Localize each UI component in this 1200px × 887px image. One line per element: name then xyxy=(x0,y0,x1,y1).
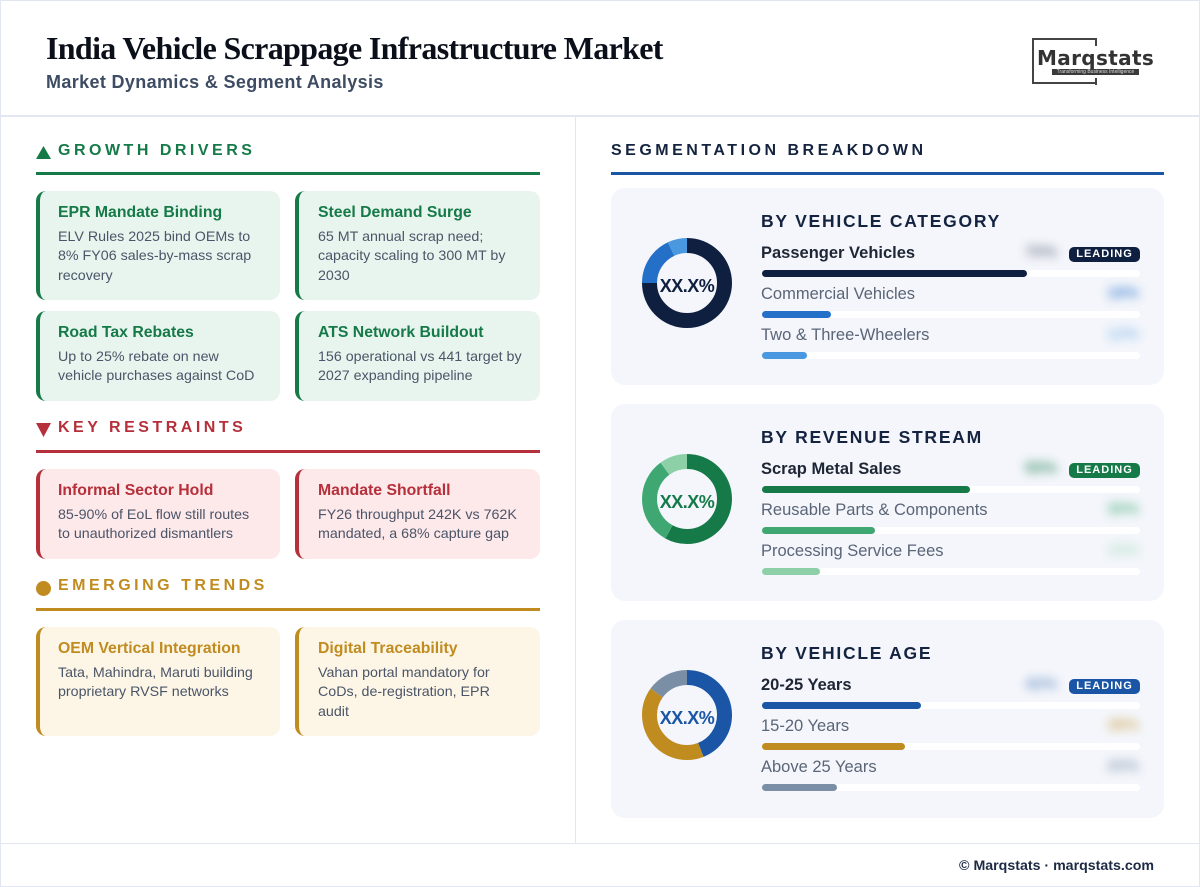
row: Passenger Vehicles: 70% xyxy=(1025,244,1057,261)
row: Two & Three-Wheelers: Two & Three-Wheelers xyxy=(761,326,929,344)
card: Road Tax Rebates: vehicle purchases against CoD xyxy=(58,368,254,384)
card: EPR Mandate Binding: EPR Mandate Binding xyxy=(58,204,222,221)
segment title: BY REVENUE STREAM xyxy=(761,427,983,447)
row: Two & Three-Wheelers xyxy=(761,324,1142,359)
row: Scrap Metal Sales: Scrap Metal Sales xyxy=(761,460,901,478)
row: 20-25 Years: 42% xyxy=(1025,676,1057,693)
footer xyxy=(1,843,1199,886)
row: 20-25 Years xyxy=(761,672,1140,709)
card: Road Tax Rebates xyxy=(36,311,280,401)
heading: emerging trends: EMERGING TRENDS xyxy=(58,577,268,594)
card: Digital Traceability: audit xyxy=(318,704,349,720)
row: Above 25 Years: 20% xyxy=(1107,758,1139,775)
row: Commercial Vehicles xyxy=(761,281,1144,318)
row: Processing Service Fees: Processing Service Fees xyxy=(761,542,944,560)
card: OEM Vertical Integration: OEM Vertical Integration xyxy=(58,640,241,657)
card: Road Tax Rebates: Up to 25% rebate on new xyxy=(58,348,219,364)
donut chart: revenue stream: XX.X% xyxy=(660,492,715,512)
panel: emerging trends xyxy=(36,577,540,736)
card: Digital Traceability: CoDs, de-registration, EPR xyxy=(318,684,490,700)
heading: segmentation breakdown: SEGMENTATION BREAKDOWN xyxy=(611,142,927,159)
row: Processing Service Fees xyxy=(761,541,1140,575)
row: Passenger Vehicles xyxy=(761,240,1140,277)
panel: key restraints xyxy=(36,419,540,559)
column divider xyxy=(575,117,576,843)
panel: growth drivers xyxy=(36,142,540,401)
icon: down triangle xyxy=(36,423,51,437)
card: Mandate Shortfall xyxy=(295,469,540,559)
card: EPR Mandate Binding: recovery xyxy=(58,268,113,284)
row: Commercial Vehicles: 18% xyxy=(1107,285,1139,302)
row: Scrap Metal Sales: LEADING xyxy=(1076,464,1133,476)
heading: key restraints xyxy=(36,419,540,453)
logo: Marqstats: Transforming Business Intelligence xyxy=(1057,69,1134,75)
subtitle: Market Dynamics & Segment Analysis xyxy=(46,72,384,92)
card: EPR Mandate Binding: ELV Rules 2025 bind OEMs to xyxy=(58,228,250,244)
panel: by vehicle category xyxy=(611,188,1164,385)
card: Informal Sector Hold: Informal Sector Hold xyxy=(58,482,213,499)
card: ATS Network Buildout: 2027 expanding pipeline xyxy=(318,368,473,384)
segment title: BY VEHICLE CATEGORY xyxy=(761,211,1001,231)
card: Steel Demand Surge: 2030 xyxy=(318,268,350,284)
row: Scrap Metal Sales: 55% xyxy=(1025,460,1057,477)
card: Mandate Shortfall: FY26 throughput 242K vs 762K xyxy=(318,506,517,522)
donut chart: vehicle age: XX.X% xyxy=(660,708,715,728)
card: Steel Demand Surge: 65 MT annual scrap need; xyxy=(318,228,483,244)
donut chart: revenue stream xyxy=(642,454,732,544)
donut chart: vehicle category: XX.X% xyxy=(660,276,715,296)
donut chart: vehicle category xyxy=(642,238,732,328)
card: ATS Network Buildout xyxy=(295,311,540,401)
card: Informal Sector Hold: to unauthorized dismantlers xyxy=(58,526,233,542)
card: Steel Demand Surge xyxy=(295,191,540,300)
row: Passenger Vehicles: Passenger Vehicles xyxy=(761,244,915,262)
row: Scrap Metal Sales xyxy=(761,456,1140,493)
heading: segmentation breakdown xyxy=(611,142,1164,175)
row: 20-25 Years: LEADING xyxy=(1076,680,1133,692)
card: Mandate Shortfall: mandated, a 68% capture gap xyxy=(318,526,509,542)
panel: by revenue stream xyxy=(611,404,1164,601)
card: Informal Sector Hold xyxy=(36,469,280,559)
heading: growth drivers: GROWTH DRIVERS xyxy=(58,142,255,159)
card: Digital Traceability xyxy=(295,627,540,736)
heading: growth drivers xyxy=(36,142,540,175)
row: Above 25 Years: Above 25 Years xyxy=(761,758,877,776)
row: Passenger Vehicles: LEADING xyxy=(1076,248,1133,260)
card: Informal Sector Hold: 85-90% of EoL flow still routes xyxy=(58,506,249,522)
footer credit: © Marqstats · marqstats.com xyxy=(959,858,1154,874)
card: OEM Vertical Integration xyxy=(36,627,280,736)
card: EPR Mandate Binding: 8% FY06 sales-by-mass scrap xyxy=(58,248,251,264)
row: Commercial Vehicles: Commercial Vehicles xyxy=(761,285,915,303)
logo: Marqstats: Marqstats xyxy=(1037,46,1154,70)
card: Steel Demand Surge: capacity scaling to 300 MT by xyxy=(318,248,505,264)
donut chart: vehicle age xyxy=(642,670,732,760)
card: OEM Vertical Integration: Tata, Mahindra, Maruti building xyxy=(58,664,253,680)
row: Above 25 Years xyxy=(761,755,1142,791)
segment title: BY VEHICLE AGE xyxy=(761,643,932,663)
row: 15-20 Years: 38% xyxy=(1107,717,1139,734)
row: Reusable Parts & Components xyxy=(761,497,1144,534)
row: Reusable Parts & Components: Reusable Parts & Components xyxy=(761,501,988,519)
card: Digital Traceability: Digital Traceability xyxy=(318,640,458,657)
card: OEM Vertical Integration: proprietary RVSF networks xyxy=(58,684,229,700)
header xyxy=(1,1,1199,117)
card: Road Tax Rebates: Road Tax Rebates xyxy=(58,324,194,341)
card: Mandate Shortfall: Mandate Shortfall xyxy=(318,482,451,499)
panel: by vehicle age xyxy=(611,620,1164,818)
row: Reusable Parts & Components: 30% xyxy=(1107,501,1139,518)
row: Two & Three-Wheelers: 12% xyxy=(1107,326,1139,343)
logo: Marqstats xyxy=(1032,38,1154,85)
title: India Vehicle Scrappage Infrastructure Market xyxy=(46,30,663,66)
card: ATS Network Buildout: ATS Network Buildout xyxy=(318,324,484,341)
row: 20-25 Years: 20-25 Years xyxy=(761,676,852,694)
row: Processing Service Fees: 15% xyxy=(1107,542,1139,559)
card: ATS Network Buildout: 156 operational vs 441 target by xyxy=(318,348,522,364)
row: 15-20 Years: 15-20 Years xyxy=(761,717,849,735)
card: Digital Traceability: Vahan portal mandatory for xyxy=(318,664,490,680)
card: EPR Mandate Binding xyxy=(36,191,280,300)
heading: emerging trends xyxy=(36,577,540,611)
heading: key restraints: KEY RESTRAINTS xyxy=(58,419,246,436)
icon: up triangle xyxy=(36,146,51,159)
row: 15-20 Years xyxy=(761,713,1143,750)
card: Steel Demand Surge: Steel Demand Surge xyxy=(318,204,472,221)
icon: circle xyxy=(36,581,51,596)
